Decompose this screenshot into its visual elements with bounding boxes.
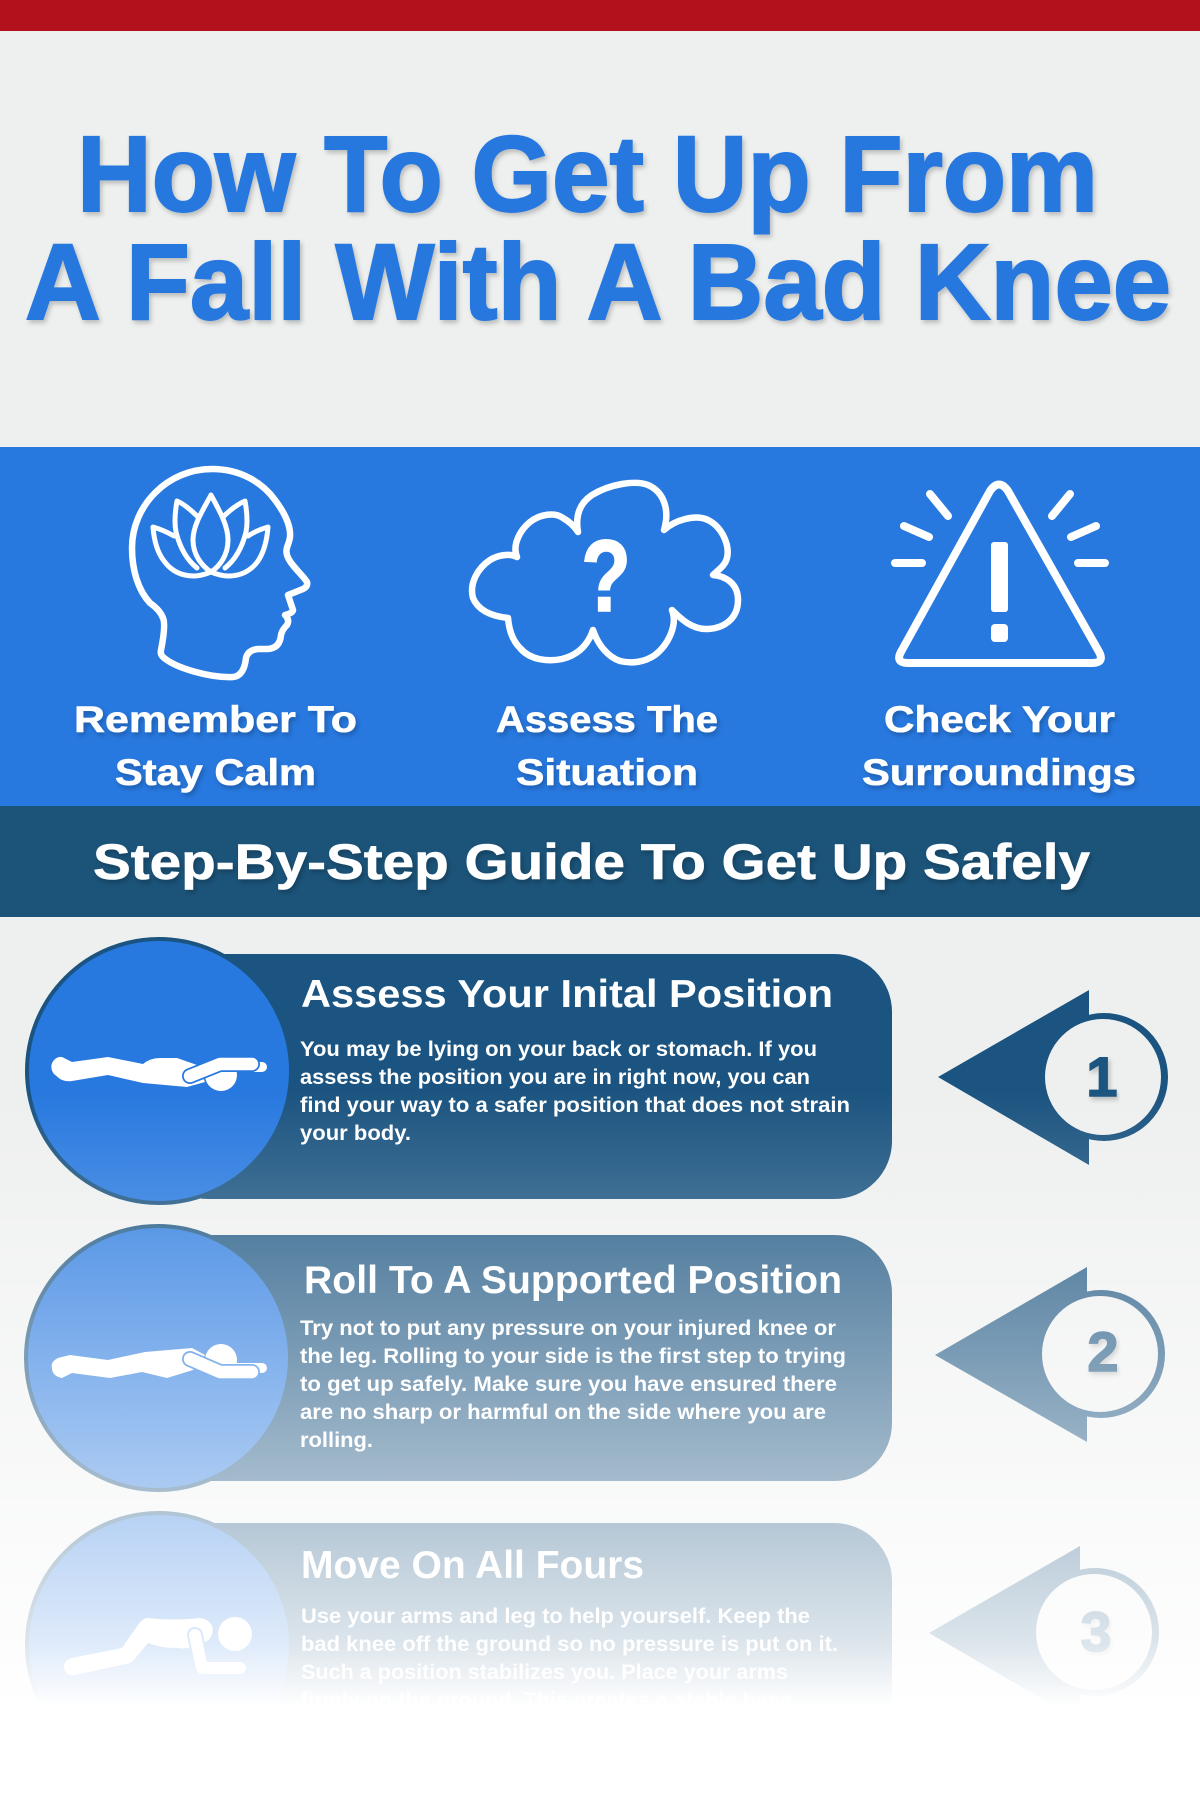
step 1 body text [300, 1038, 850, 1145]
step 3 panel [27, 1513, 1159, 1777]
label: assess the situation [496, 699, 718, 793]
step 3 body text: bad knee off the ground so no pressure is put on it. [301, 1633, 838, 1656]
step 2 body text: rolling. [300, 1429, 373, 1452]
label: remember to stay calm [74, 699, 357, 793]
step 3 pill [150, 1523, 892, 1769]
step 1 panel [27, 939, 1168, 1203]
step 3 body text: Such a position stabilizes you. Place your arms [301, 1661, 788, 1684]
step 1 pill [150, 954, 892, 1199]
step 2 arrow badge [935, 1267, 1165, 1442]
icon: head with lotus [132, 469, 307, 677]
section heading band: Step-By-Step Guide To Get Up Safely [93, 834, 1090, 890]
label: assess the situation: Situation [516, 752, 698, 793]
step 3 heading: Move On All Fours [301, 1544, 644, 1587]
step 2 panel [26, 1226, 1165, 1490]
step 2 body text: Try not to put any pressure on your injured knee or [300, 1317, 836, 1340]
step 2 body text: are no sharp or harmful on the side where you are [300, 1401, 826, 1424]
label: assess the situation: Assess The [496, 699, 718, 740]
icon: person lying face up [51, 1057, 267, 1091]
step 1 body text: find your way to a safer position that does not strain [300, 1094, 850, 1117]
step 3 body text: firmly on the ground. This creates a stable base. [301, 1689, 798, 1712]
label: check your surroundings [862, 699, 1136, 793]
step 3 body text: Use your arms and leg to help yourself. Keep the [301, 1605, 810, 1628]
step 2 body text: the leg. Rolling to your side is the first step to trying [300, 1345, 846, 1368]
step 3 body text [301, 1605, 838, 1712]
title [25, 113, 1171, 342]
label: check your surroundings: Surroundings [862, 752, 1136, 793]
icon: warning triangle [895, 484, 1105, 663]
step 3 circle [27, 1513, 291, 1777]
step 2 heading: Roll To A Supported Position [304, 1259, 842, 1302]
title: A Fall With A Bad Knee [25, 221, 1171, 342]
icon: cloud with question mark: ? [581, 519, 631, 633]
label: remember to stay calm: Remember To [74, 699, 357, 740]
step 2 arrow badge: 2 [1087, 1320, 1119, 1383]
step 3 arrow badge [929, 1546, 1159, 1721]
step 1 body text: your body. [300, 1122, 411, 1145]
step 1 body text: You may be lying on your back or stomach. If you [300, 1038, 817, 1061]
step 1 circle [27, 939, 291, 1203]
icon: person rolled over [52, 1344, 267, 1378]
label: remember to stay calm: Stay Calm [115, 752, 316, 793]
icon: person on all fours [64, 1617, 252, 1675]
top red bar [0, 0, 1200, 31]
step 1 body text: assess the position you are in right now, you can [300, 1066, 810, 1089]
section heading band [0, 806, 1200, 917]
step 1 arrow badge: 1 [1086, 1045, 1118, 1108]
step 2 body text: to get up safely. Make sure you have ensured there [300, 1373, 837, 1396]
title: How To Get Up From [77, 113, 1098, 234]
step 1 heading: Assess Your Inital Position [301, 973, 833, 1016]
icon: cloud with question mark [472, 483, 738, 662]
step 2 pill [150, 1235, 892, 1481]
step 1 arrow badge [938, 990, 1168, 1165]
step 3 arrow badge: 3 [1080, 1600, 1112, 1663]
step 2 body text [300, 1317, 846, 1452]
step 2 circle [26, 1226, 290, 1490]
label: check your surroundings: Check Your [884, 699, 1115, 740]
panel: first response tips [0, 447, 1200, 806]
